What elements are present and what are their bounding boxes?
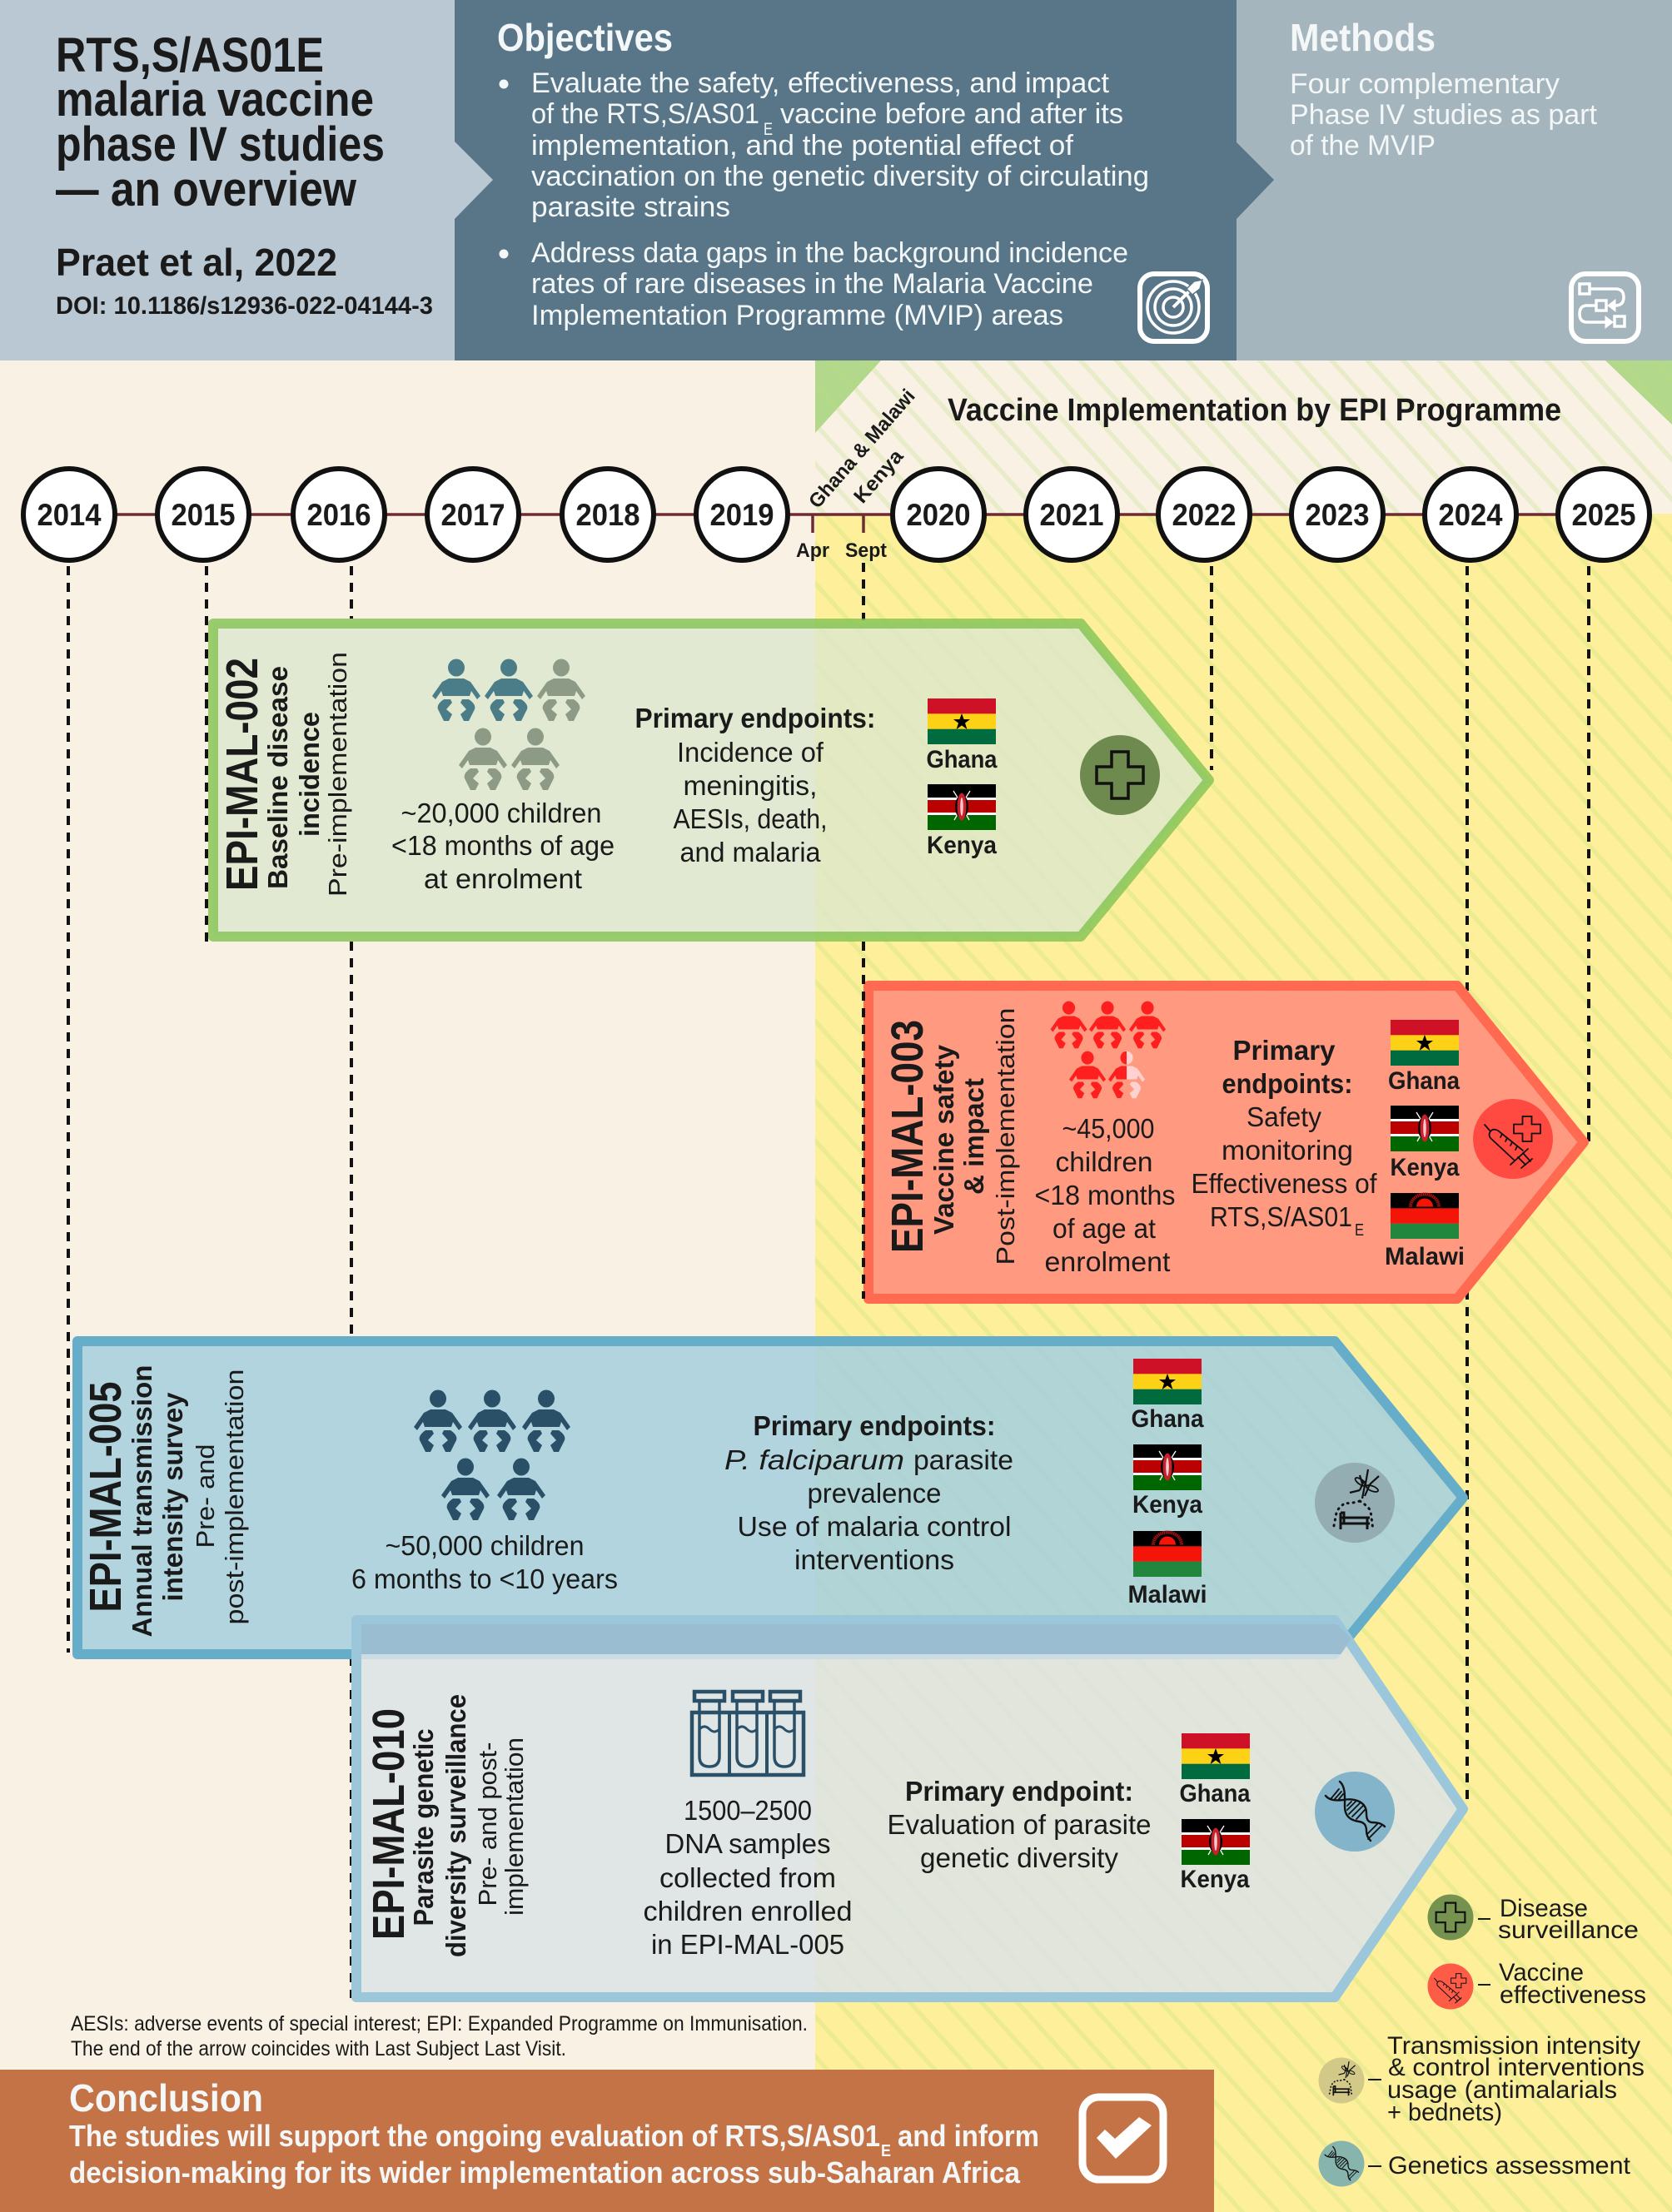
study description: intensity survey <box>157 1392 188 1602</box>
primary endpoints <box>724 1410 1013 1575</box>
heading: vaccine implementation: Vaccine Implementation by EPI Programme <box>948 393 1561 428</box>
flag: Ghana: Ghana <box>926 746 998 773</box>
sample text: 1500–2500 <box>684 1795 812 1826</box>
objective 2: Implementation Programme (MVIP) areas <box>531 300 1063 331</box>
title: malaria vaccine <box>56 72 374 127</box>
population text: at enrolment <box>424 863 582 894</box>
legend: genetics assessment <box>1319 2141 1631 2186</box>
year 2024: 2024 <box>1439 498 1503 532</box>
flag: Kenya <box>1132 1444 1202 1519</box>
year 2014: 2014 <box>37 498 102 532</box>
panel: conclusion <box>0 2070 1214 2212</box>
footnote: AESIs: adverse events of special interest; EPI: Expanded Programme on Immunisation. <box>71 2012 808 2036</box>
flag: Ghana: Ghana <box>1179 1780 1251 1807</box>
header panel: title <box>0 0 493 360</box>
title <box>56 28 385 216</box>
header panel: methods <box>1237 0 1672 360</box>
primary endpoints: Effectiveness of <box>1191 1168 1377 1199</box>
milestone: Kenya: Kenya <box>849 445 908 508</box>
study description <box>262 652 352 897</box>
study name: EPI-MAL-005 <box>81 1382 131 1612</box>
icon: methods flow <box>1571 274 1639 341</box>
label: Apr: Apr <box>796 539 829 562</box>
year 2019: 2019 <box>709 498 774 532</box>
legend: vaccine effectiveness <box>1427 1959 1646 2010</box>
primary endpoint <box>888 1776 1151 1873</box>
flag: Malawi <box>1385 1193 1465 1270</box>
label: Sept: Sept <box>845 539 887 562</box>
flag: Ghana <box>1179 1733 1251 1807</box>
primary endpoints: Primary endpoints: <box>634 703 876 733</box>
panel: EPI-MAL-005 <box>77 1341 1463 1654</box>
flag: Kenya: Kenya <box>1391 1154 1460 1181</box>
objective 1: vaccine before and after its <box>780 98 1123 130</box>
objective 2 <box>500 237 1128 331</box>
flag: Kenya: Kenya <box>1181 1866 1250 1893</box>
overlap band <box>361 1624 1351 1654</box>
citation: Praet et al, 2022 <box>56 241 337 284</box>
legend: vaccine effectiveness: Vaccine <box>1499 1959 1584 1986</box>
corner accent: left green triangle <box>815 360 881 433</box>
footnote: The end of the arrow coincides with Last Subject Last Visit. <box>71 2037 566 2060</box>
objective 1: implementation, and the potential effect of <box>531 130 1074 162</box>
flag: Ghana: Ghana <box>1388 1067 1460 1095</box>
population text: ~50,000 children <box>385 1530 585 1561</box>
conclusion text: decision-making for its wider implementation across sub-Saharan Africa <box>69 2155 1021 2190</box>
title: RTS,S/AS01E <box>56 28 324 82</box>
population text <box>1034 1113 1176 1277</box>
population text: enrolment <box>1044 1246 1171 1277</box>
icon: disease surveillance <box>1080 735 1160 815</box>
primary endpoints: AESIs, death, <box>673 803 828 834</box>
flag: Kenya <box>1181 1819 1250 1893</box>
primary endpoints: prevalence <box>808 1478 941 1509</box>
start date guide <box>862 942 865 1299</box>
study description: Annual transmission <box>127 1365 157 1637</box>
year 2024 <box>1425 469 1516 560</box>
objective 1: E <box>764 120 773 139</box>
population text <box>391 798 615 894</box>
conclusion text <box>69 2119 1039 2190</box>
legend: transmission intensity <box>1319 2032 1645 2126</box>
primary endpoints: P. falciparum <box>724 1444 904 1475</box>
primary endpoints: Use of malaria control <box>738 1511 1011 1542</box>
study description: Pre- and <box>191 1444 220 1548</box>
icon: DNA <box>1315 1772 1395 1852</box>
methods text: Four complementary <box>1290 68 1560 100</box>
arrow: EPI-MAL-010 <box>356 1620 1463 1997</box>
corner accent: right green triangle <box>1605 360 1672 425</box>
study description <box>408 1694 529 1957</box>
year 2025: 2025 <box>1572 498 1635 532</box>
dashed year guides <box>68 563 1589 1998</box>
study name: EPI-MAL-010 <box>364 1708 414 1940</box>
sample text: children enrolled <box>643 1896 853 1926</box>
study name: EPI-MAL-002 <box>217 658 267 891</box>
study description: diversity surveillance <box>440 1694 471 1957</box>
icon: transmission and bednets <box>1315 1463 1395 1543</box>
conclusion text: E <box>881 2142 891 2160</box>
icon: test tubes <box>692 1692 804 1775</box>
year 2020: 2020 <box>906 498 971 532</box>
year 2018 <box>562 469 654 560</box>
arrow: EPI-MAL-002 <box>213 624 1209 937</box>
arrow: EPI-MAL-005 <box>77 1341 1463 1654</box>
sample text: DNA samples <box>664 1828 831 1859</box>
heading: conclusion: Conclusion <box>69 2076 263 2120</box>
year 2015 <box>157 469 249 560</box>
flag: Malawi: Malawi <box>1385 1243 1465 1270</box>
year 2019 <box>696 469 788 560</box>
population text <box>351 1530 618 1594</box>
year 2021: 2021 <box>1039 498 1104 532</box>
panel: EPI-MAL-003 <box>863 942 1584 1299</box>
objective 2: Address data gaps in the background incidence <box>531 237 1128 269</box>
year 2023: 2023 <box>1306 498 1369 532</box>
population text: children <box>1056 1146 1152 1177</box>
objective 1 <box>500 67 1149 223</box>
title: phase IV studies <box>56 117 385 171</box>
primary endpoints: Primary <box>1232 1035 1336 1066</box>
header panel: objectives <box>455 0 1274 360</box>
flag: Kenya <box>927 784 997 859</box>
flag: Kenya: Kenya <box>1132 1491 1202 1519</box>
study description: Baseline disease <box>262 666 293 889</box>
study description: Vaccine safety <box>928 1044 959 1235</box>
year 2020 <box>893 469 984 560</box>
heading: objectives: Objectives <box>497 16 673 59</box>
primary endpoints: E <box>1355 1221 1364 1240</box>
citation <box>56 241 433 320</box>
objective 1: parasite strains <box>531 191 730 223</box>
study description: Parasite genetic <box>408 1728 439 1926</box>
heading: methods: Methods <box>1290 16 1436 59</box>
population text: ~20,000 children <box>401 798 601 828</box>
icon: target <box>1140 274 1207 341</box>
year 2022 <box>1158 469 1250 560</box>
year 2015: 2015 <box>172 498 235 532</box>
year 2018: 2018 <box>576 498 639 532</box>
legend: disease surveillance <box>1427 1895 1639 1944</box>
icon: children <box>414 1390 570 1520</box>
study name: EPI-MAL-003 <box>883 1020 933 1253</box>
objective 1: Evaluate the safety, effectiveness, and impact <box>531 67 1110 99</box>
study description: Post-implementation <box>991 1007 1020 1265</box>
legend: disease surveillance: Disease <box>1500 1895 1588 1922</box>
background: post-implementation <box>815 514 1672 2212</box>
arrow: EPI-MAL-003 <box>868 986 1584 1299</box>
year 2023 <box>1291 469 1383 560</box>
legend: transmission intensity: & control interventions <box>1388 2054 1645 2081</box>
study description: post-implementation <box>220 1369 249 1625</box>
year 2016: 2016 <box>306 498 371 532</box>
year 2017: 2017 <box>441 498 505 532</box>
flag: Kenya <box>1391 1106 1460 1181</box>
study description <box>127 1365 249 1637</box>
year 2014 <box>23 469 115 560</box>
milestone: Ghana and Malawi: Ghana & Malawi <box>804 385 920 513</box>
legend: vaccine effectiveness: effectiveness <box>1500 1981 1646 2009</box>
methods text: Phase IV studies as part <box>1290 99 1598 131</box>
primary endpoints <box>634 703 876 867</box>
icon: vaccine effectiveness <box>1473 1099 1553 1179</box>
icon: check box <box>1082 2097 1163 2180</box>
sample text: collected from <box>659 1862 836 1893</box>
flag: Kenya: Kenya <box>927 832 997 859</box>
year 2016 <box>293 469 385 560</box>
methods text <box>1290 68 1598 162</box>
legend: transmission intensity: usage (antimalarials <box>1387 2076 1617 2104</box>
year 2022: 2022 <box>1172 498 1236 532</box>
primary endpoints: and malaria <box>679 837 821 867</box>
study description: Pre- and post- <box>473 1742 502 1906</box>
conclusion text: and inform <box>898 2119 1039 2153</box>
year 2017 <box>427 469 519 560</box>
study description: implementation <box>500 1737 529 1916</box>
flag: Ghana: Ghana <box>1131 1405 1204 1433</box>
footnote <box>71 2012 808 2060</box>
legend: transmission intensity: Transmission intensity <box>1387 2032 1640 2060</box>
sample text <box>643 1795 853 1960</box>
population text: of age at <box>1052 1213 1156 1244</box>
study description <box>928 1007 1020 1265</box>
population text: <18 months of age <box>391 830 615 861</box>
study description: Pre-implementation <box>323 652 352 897</box>
population text: <18 months <box>1034 1180 1176 1210</box>
year 2021 <box>1026 469 1117 560</box>
primary endpoints: interventions <box>794 1544 954 1575</box>
objective 1: vaccination on the genetic diversity of circulating <box>531 161 1149 192</box>
flag: Malawi: Malawi <box>1127 1581 1207 1608</box>
panel: EPI-MAL-002 <box>213 624 1209 937</box>
year 2025 <box>1558 469 1650 560</box>
primary endpoints: RTS,S/AS01 <box>1210 1201 1352 1232</box>
primary endpoints <box>1191 1035 1377 1240</box>
methods text: of the MVIP <box>1290 130 1436 162</box>
objective 2: rates of rare diseases in the Malaria Vaccine <box>531 268 1093 300</box>
primary endpoints: monitoring <box>1222 1135 1353 1166</box>
primary endpoint: Evaluation of parasite <box>888 1809 1151 1840</box>
flag: Ghana <box>926 698 998 773</box>
legend: disease surveillance: surveillance <box>1498 1916 1639 1944</box>
citation: DOI: 10.1186/s12936-022-04144-3 <box>56 292 433 320</box>
primary endpoint: Primary endpoint: <box>905 1776 1133 1807</box>
primary endpoints: Incidence of <box>677 737 824 768</box>
primary endpoints: parasite <box>913 1444 1013 1475</box>
study description: incidence <box>294 712 325 837</box>
study description: & impact <box>958 1078 989 1195</box>
primary endpoint: genetic diversity <box>920 1842 1119 1873</box>
primary endpoints: endpoints: <box>1222 1068 1352 1099</box>
panel: EPI-MAL-010 <box>356 1620 1463 1997</box>
legend: genetics assessment: Genetics assessment <box>1388 2152 1631 2180</box>
flag: Malawi <box>1127 1531 1207 1608</box>
primary endpoints: Primary endpoints: <box>753 1410 996 1441</box>
icon: children <box>432 659 585 790</box>
population text: 6 months to <10 years <box>351 1563 618 1594</box>
flag: Ghana <box>1131 1359 1204 1433</box>
timeline <box>23 385 1650 562</box>
flag: Ghana <box>1388 1020 1460 1095</box>
legend: transmission intensity: + bednets) <box>1387 2099 1502 2126</box>
sample text: in EPI-MAL-005 <box>651 1929 844 1960</box>
legend <box>1319 1895 1646 2186</box>
population text: ~45,000 <box>1062 1113 1154 1144</box>
primary endpoints: meningitis, <box>683 770 818 801</box>
icon: children <box>1051 1002 1166 1098</box>
objective 1: of the RTS,S/AS01 <box>531 98 759 130</box>
primary endpoints: Safety <box>1247 1101 1321 1132</box>
conclusion text: The studies will support the ongoing evaluation of RTS,S/AS01 <box>69 2119 880 2153</box>
title: — an overview <box>56 162 357 216</box>
